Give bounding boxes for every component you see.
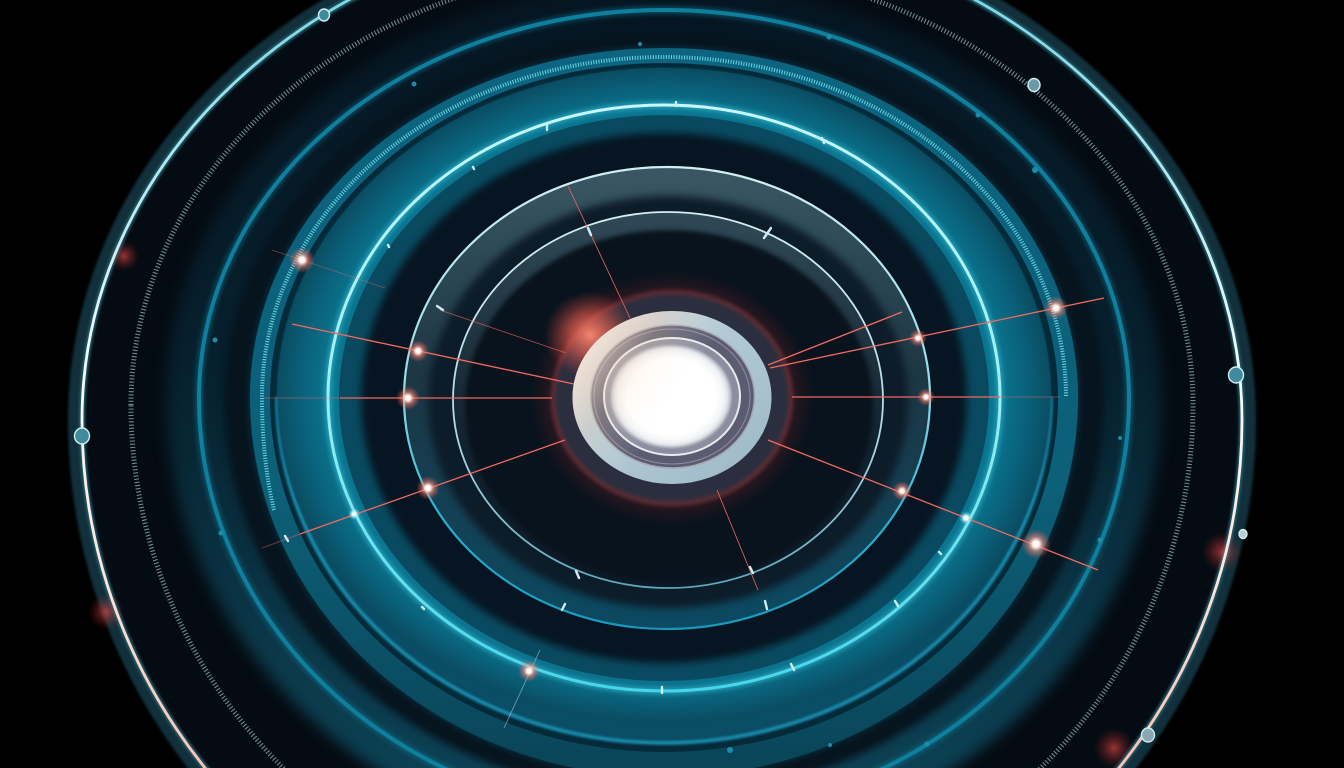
dark gap inside thin ring xyxy=(224,34,1104,768)
small white ticks on rings xyxy=(285,102,941,693)
wide teal band xyxy=(250,48,1078,768)
dotted tick ring xyxy=(131,0,1193,768)
central core xyxy=(572,311,772,484)
thin teal ring xyxy=(199,10,1129,768)
middle band xyxy=(404,167,930,629)
red glows on outer ring xyxy=(88,241,1242,768)
data tick track xyxy=(262,57,1066,510)
bright cyan ring xyxy=(328,105,1000,691)
inner ring xyxy=(453,212,883,588)
orange glare xyxy=(544,291,636,379)
central red halo xyxy=(540,280,804,516)
teal glow field xyxy=(166,0,1162,768)
dark gap xyxy=(270,63,1058,752)
small teal dots xyxy=(212,34,1122,753)
radial red rays xyxy=(262,186,1104,728)
red sparkle nodes xyxy=(289,247,1068,682)
inner band of cyan ring xyxy=(339,115,989,681)
